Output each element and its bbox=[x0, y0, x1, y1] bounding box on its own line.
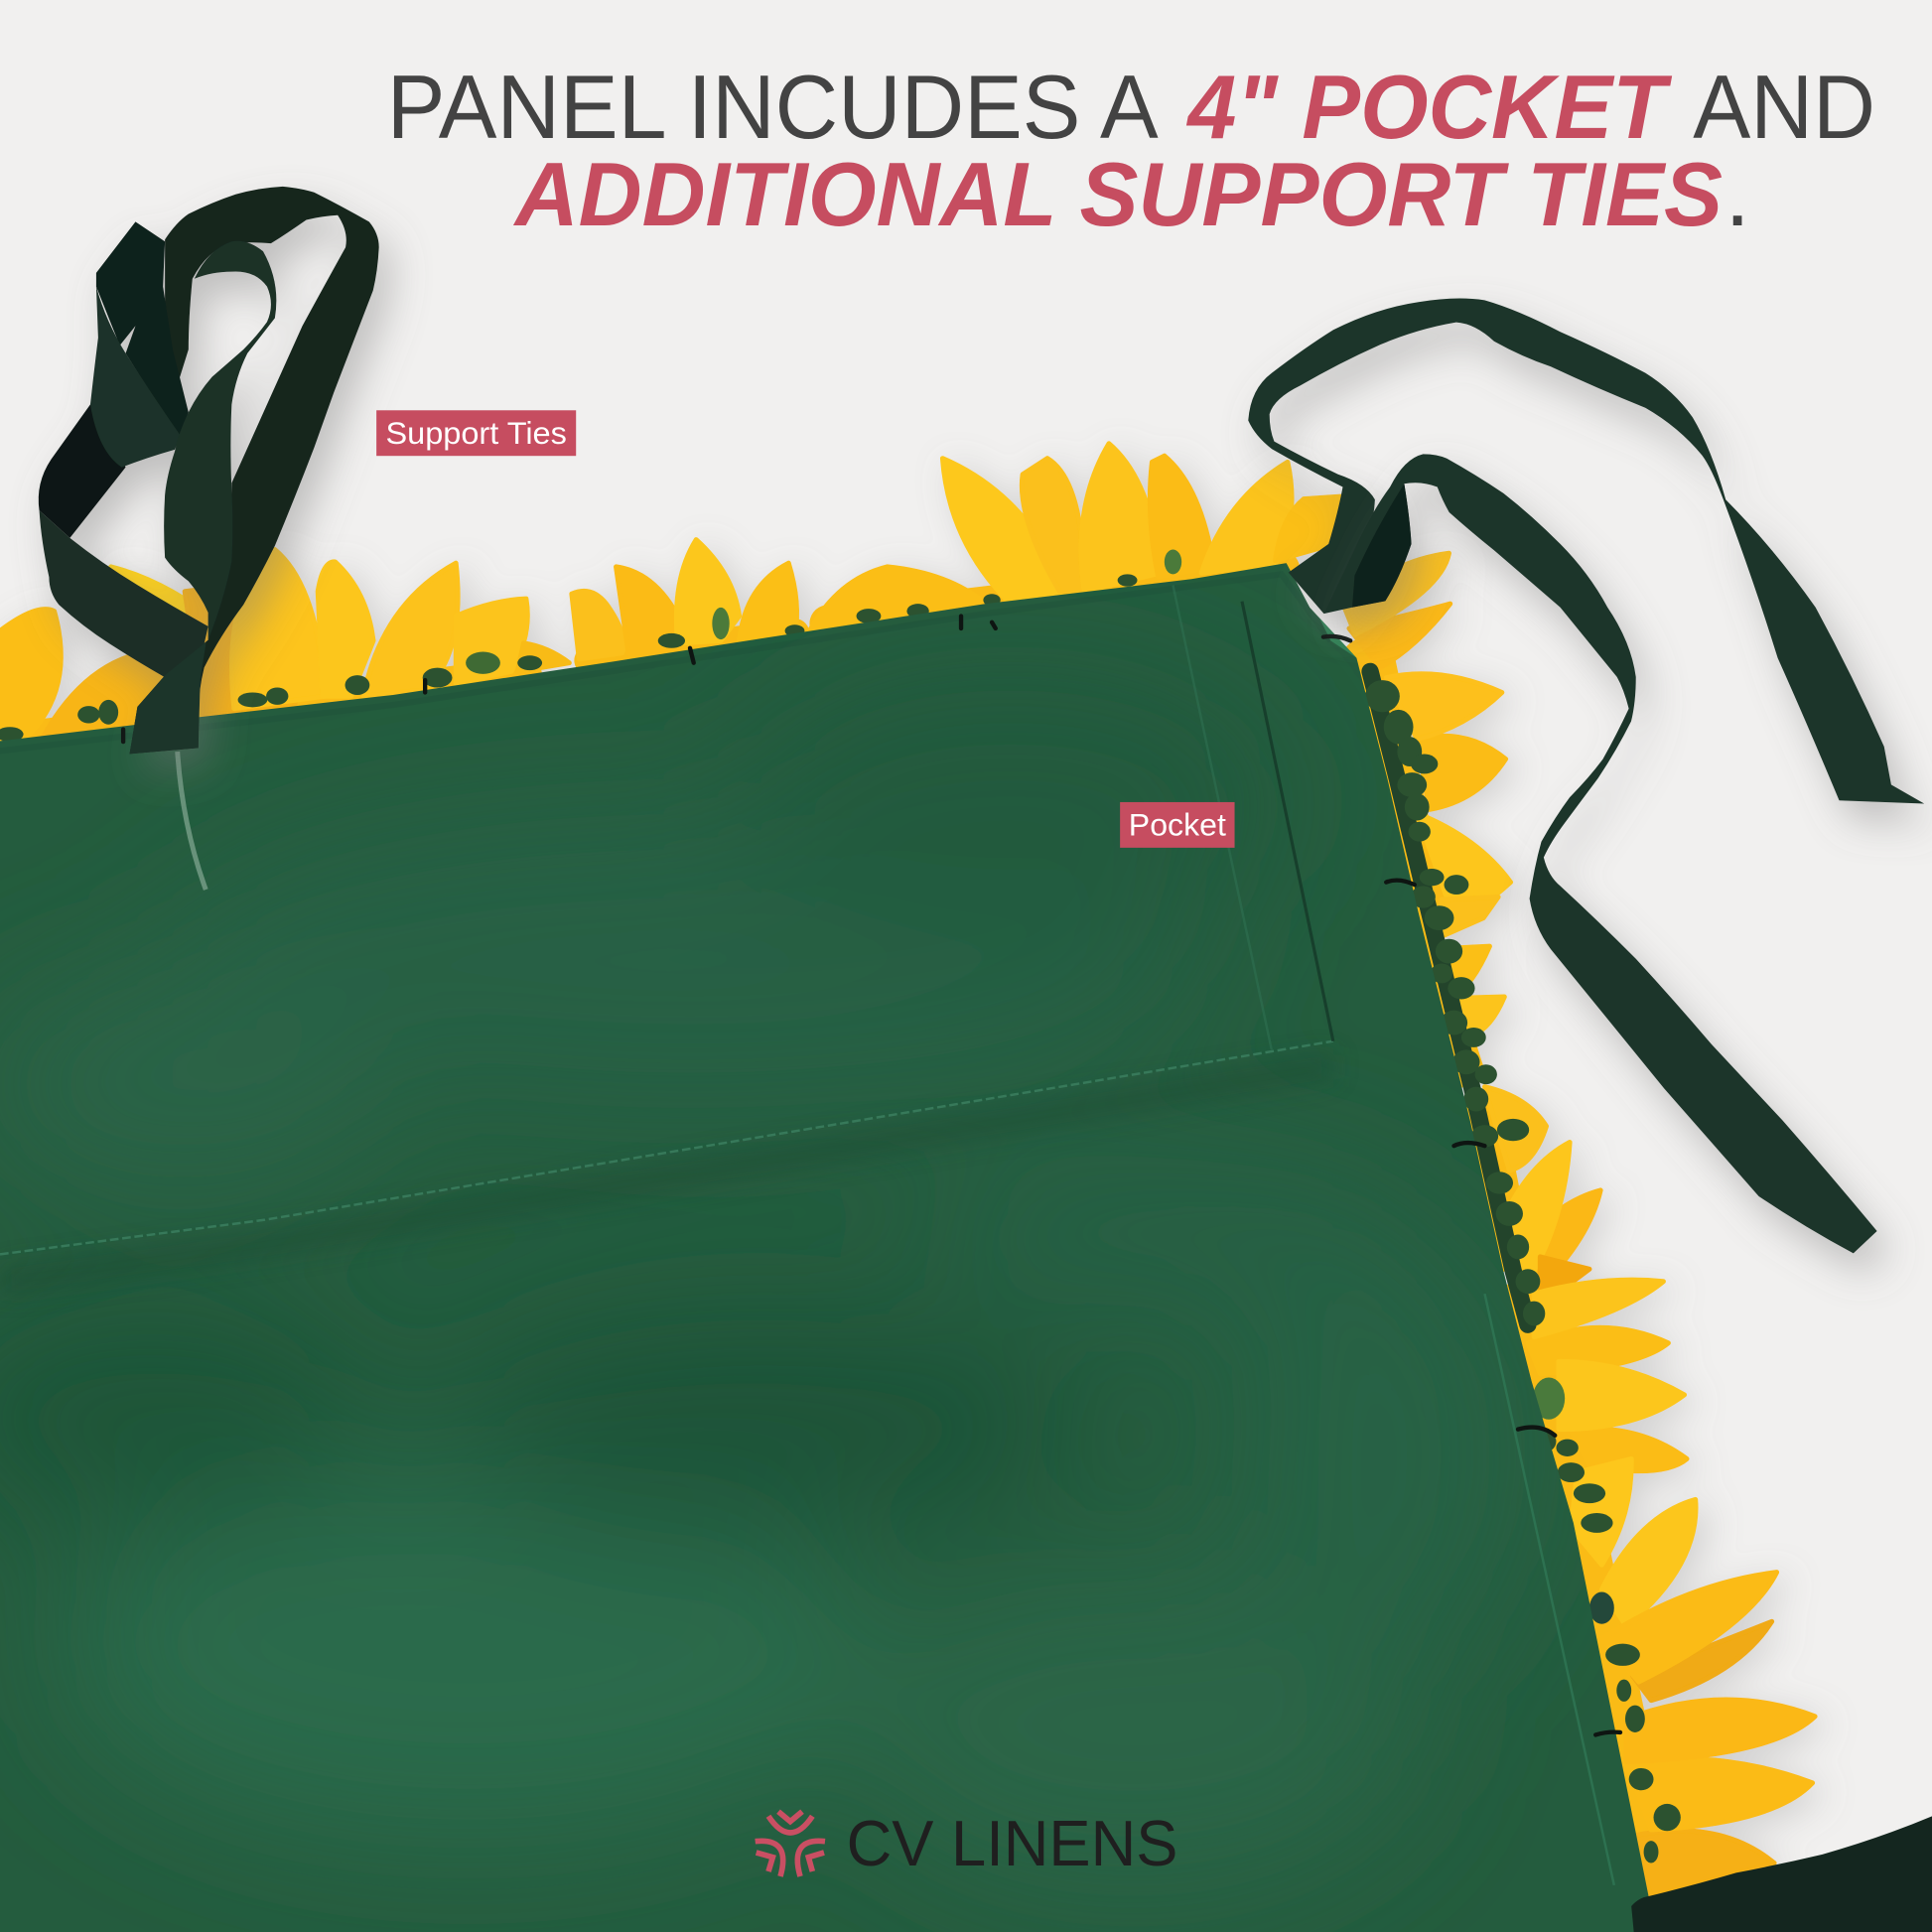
apron panel bbox=[0, 542, 1719, 1932]
right support tie, long strand bbox=[1248, 298, 1924, 803]
green leaf vine bbox=[0, 550, 1681, 1863]
logo icon bbox=[756, 1812, 825, 1876]
pocket crease bbox=[1173, 586, 1272, 1049]
stitch threads bbox=[123, 617, 1620, 1734]
black fold bbox=[39, 404, 126, 538]
fabric shading bbox=[0, 665, 1528, 1885]
shadow under pocket seam bbox=[974, 1106, 1072, 1127]
pale crease bbox=[178, 752, 206, 890]
title line two: ADDITIONAL SUPPORT TIES bbox=[513, 145, 1723, 245]
petal bases bbox=[0, 569, 1649, 1879]
central strand bbox=[164, 241, 276, 640]
top hem highlight bbox=[1309, 607, 1311, 608]
pocket seam bbox=[0, 1041, 1333, 1254]
title line two: . bbox=[1725, 145, 1750, 245]
logo wordmark: CV LINENS bbox=[847, 1808, 1177, 1879]
corner tab bbox=[1318, 618, 1356, 657]
left support ties bbox=[39, 187, 379, 754]
strand base bbox=[130, 642, 207, 754]
logo bbox=[756, 1808, 1177, 1879]
callout: pocket: Pocket bbox=[1129, 807, 1226, 842]
right support tie, hanging strand bbox=[1323, 454, 1877, 1253]
outer loop strand bbox=[130, 187, 379, 754]
side seam bbox=[1484, 1294, 1614, 1885]
callout: pocket bbox=[1120, 802, 1235, 848]
sunflower petals bbox=[0, 444, 1815, 1897]
middle fold bbox=[90, 287, 181, 468]
callout: support ties bbox=[376, 410, 576, 456]
title line one: PANEL INCUDES A bbox=[387, 58, 1159, 158]
title bbox=[387, 58, 1875, 245]
callout: support ties: Support Ties bbox=[385, 416, 567, 451]
title line one: 4" POCKET bbox=[1185, 58, 1672, 158]
title line one: AND bbox=[1693, 58, 1875, 158]
bottom right tie bbox=[1631, 1816, 1932, 1932]
lower band bbox=[40, 510, 208, 677]
title line one bbox=[387, 58, 1875, 158]
upper tail bbox=[96, 221, 189, 438]
pocket side edge bbox=[1242, 602, 1333, 1041]
